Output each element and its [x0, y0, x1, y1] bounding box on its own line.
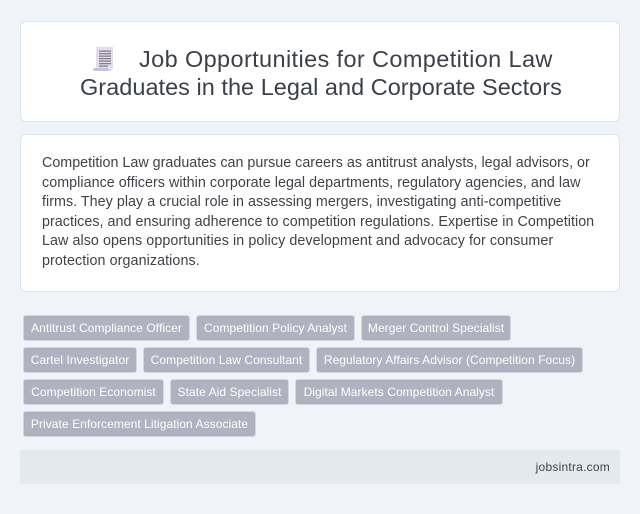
tag: Competition Law Consultant	[151, 353, 302, 367]
tag	[196, 315, 355, 341]
tag	[361, 315, 511, 341]
tag	[143, 347, 310, 373]
description text: firms. They play a crucial role in assessing mergers, investigating anti-competitive	[42, 194, 561, 210]
footer	[20, 450, 620, 484]
tag	[23, 411, 256, 437]
panel: job tags	[23, 315, 583, 437]
tag	[295, 379, 503, 405]
description text	[42, 155, 594, 268]
tag	[23, 347, 137, 373]
title line 1: Job Opportunities for Competition Law	[139, 46, 553, 72]
tag: Regulatory Affairs Advisor (Competition Focus)	[324, 353, 575, 367]
description text: protection organizations.	[42, 252, 200, 268]
description text: Competition Law graduates can pursue careers as antitrust analysts, legal advisors, or	[42, 155, 590, 171]
icon: document scroll	[93, 47, 113, 71]
tag: Digital Markets Competition Analyst	[304, 385, 494, 399]
description text: compliance officers within corporate legal departments, regulatory agencies, and law	[42, 174, 581, 190]
title line 2: Graduates in the Legal and Corporate Sectors	[80, 74, 562, 100]
panel: description	[20, 134, 620, 292]
tag: State Aid Specialist	[178, 385, 281, 399]
tag	[23, 379, 164, 405]
footer text: jobsintra.com	[536, 460, 610, 474]
tag	[170, 379, 289, 405]
tag	[23, 315, 190, 341]
tag: Cartel Investigator	[31, 353, 129, 367]
description text: practices, and ensuring adherence to competition regulations. Expertise in Competition	[42, 214, 594, 230]
tag: Antitrust Compliance Officer	[31, 321, 182, 335]
tag	[316, 347, 583, 373]
tag: Merger Control Specialist	[368, 321, 504, 335]
panel: header	[20, 21, 620, 122]
tag: Competition Economist	[31, 385, 156, 399]
tag: Competition Policy Analyst	[204, 321, 347, 335]
description text: Law also opens opportunities in policy development and advocacy for consumer	[42, 233, 553, 249]
tag: Private Enforcement Litigation Associate	[31, 417, 248, 431]
